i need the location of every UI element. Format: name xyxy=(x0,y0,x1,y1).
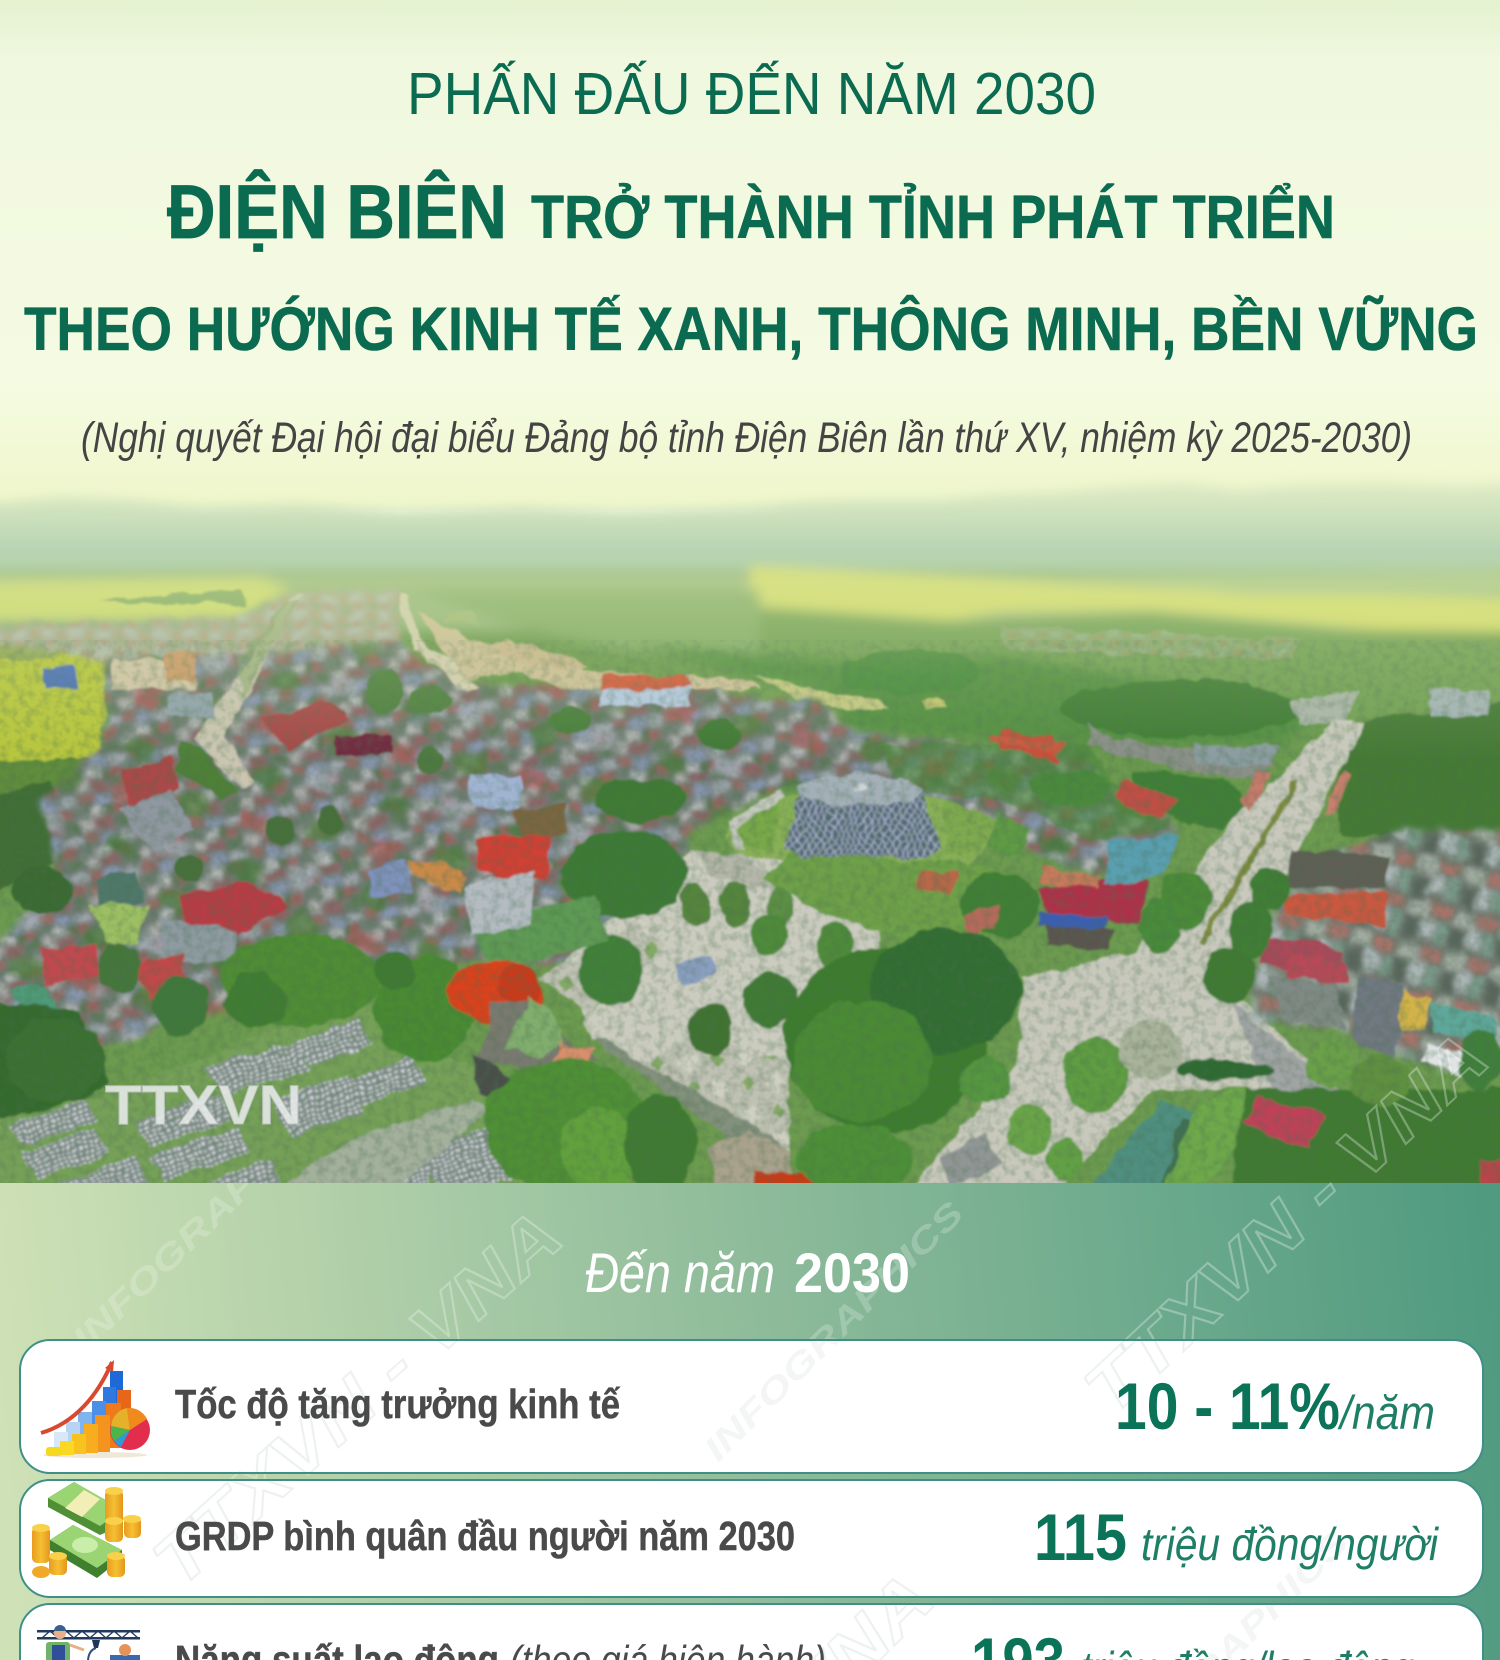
card 1: economic growth rate xyxy=(20,1340,1483,1473)
icon: worker and crane xyxy=(37,1625,140,1660)
value: 115 triệu đồng/người xyxy=(1034,1500,1440,1574)
label: Tốc độ tăng trưởng kinh tế: Tốc độ tăng trưởng kinh tế xyxy=(175,1381,620,1427)
faint watermarks over cards xyxy=(152,1341,1346,1660)
watermark: TTXVN - VNA crossing photo and panel: TTXVN - VNA xyxy=(1069,1017,1500,1429)
title line 2: ĐIỆN BIÊN xyxy=(167,169,507,255)
photo watermark: TTXVN: TTXVN xyxy=(105,1073,302,1136)
value: 10 - 11%/năm: 10 - 11% xyxy=(1115,1369,1340,1443)
title line 1: PHẤN ĐẤU ĐẾN NĂM 2030 xyxy=(407,61,1096,127)
card 3: labour productivity xyxy=(20,1604,1483,1660)
heading: Đến năm 2030: 2030 xyxy=(794,1241,910,1304)
faint watermarks over cards: TTXVN - VNA xyxy=(138,1195,576,1601)
value: 115 triệu đồng/người: 115 xyxy=(1034,1500,1127,1574)
watermarks on panel: TTXVN - VNA xyxy=(138,1195,576,1601)
icon: growth chart xyxy=(41,1360,150,1458)
title line 2: TRỞ THÀNH TỈNH PHÁT TRIỂN xyxy=(531,183,1335,251)
faint watermarks over cards: INFOGRAPHICS xyxy=(697,1194,971,1469)
watermarks on panel: INFOGRAPHICS xyxy=(697,1194,971,1469)
panel: targets to 2030 xyxy=(0,1183,1500,1660)
watermarks on panel xyxy=(65,1088,971,1601)
watermarks on panel: INFOGRAPHICS xyxy=(65,1088,344,1359)
faint watermarks over cards: TTXVN - VNA xyxy=(1069,1017,1500,1429)
label: Năng suất lao động (theo giá hiện hành) xyxy=(175,1637,826,1660)
background: pale green sky xyxy=(0,0,1500,510)
icon: money and coins xyxy=(32,1482,141,1578)
title line 2 xyxy=(167,169,1335,255)
title block xyxy=(24,61,1478,462)
value: 193 triệu đồng/lao động xyxy=(971,1624,1414,1660)
card 2: GRDP per capita xyxy=(20,1480,1483,1597)
value: 10 - 11%/năm: /năm xyxy=(1337,1386,1435,1439)
value: 115 triệu đồng/người: triệu đồng/người xyxy=(1141,1518,1440,1570)
heading: Đến năm 2030 xyxy=(585,1241,910,1304)
aerial photo of Dien Bien city xyxy=(0,482,1500,1218)
label: GRDP bình quân đầu người năm 2030: GRDP bình quân đầu người năm 2030 xyxy=(175,1513,795,1559)
heading: Đến năm 2030: Đến năm xyxy=(585,1241,775,1304)
